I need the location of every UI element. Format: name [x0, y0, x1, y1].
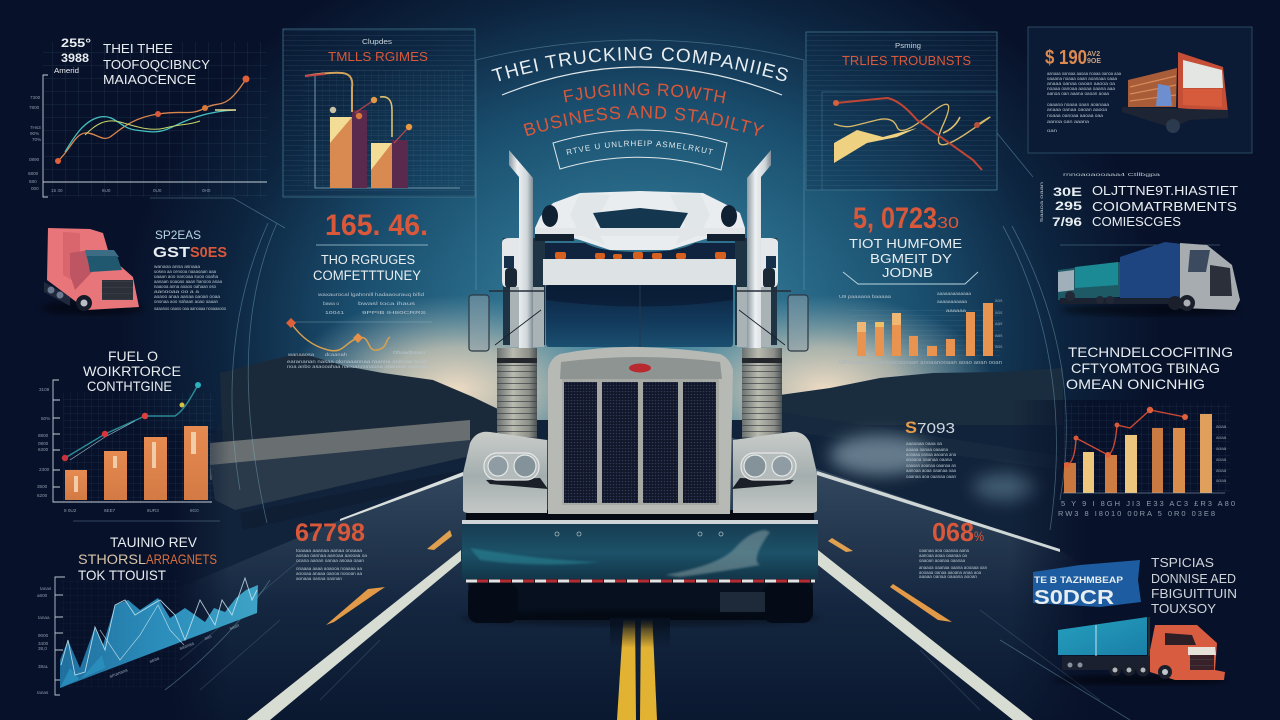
stat: 165.46 competitiveness: Dhoadhsuru — [393, 350, 426, 355]
banner text: RTVE U UNLRHEIP ASMELRKUT — [566, 140, 714, 155]
panel: top bar chart: TMLLS RGIMES — [328, 49, 428, 64]
stat: 67798: aoooaa anaaa oaooa noooan aa — [296, 571, 362, 576]
amount: $ 190 — [1045, 47, 1087, 69]
roof ledge — [535, 228, 745, 236]
panel: technology bar chart: OMEAN ONICNHIG — [1066, 376, 1205, 392]
mini line chart — [291, 323, 390, 351]
panel: top left line chart: 70% — [32, 137, 41, 142]
heading: TAUINIO REV — [110, 534, 198, 550]
panel: technology bar chart: aoaa — [1216, 446, 1227, 451]
stat: brand paint stroke: S0DCR — [1034, 587, 1115, 609]
orange dash right 2 — [828, 538, 853, 552]
panel: income bar chart: aaaaaaaaaaaaa — [937, 291, 971, 296]
cab side panels — [503, 238, 545, 345]
stat: operating costs list: COMIESCGES — [1092, 214, 1181, 229]
stat: pink truck text: aanaan ooaoao aaan hanooo anaa — [154, 279, 222, 284]
panel: top left line chart: Amerid — [54, 68, 79, 75]
panel: top left line chart: 6U0 — [102, 188, 111, 193]
panel: income bar chart — [839, 291, 1003, 366]
trend lines — [305, 73, 352, 112]
panel: top left line chart: TOOFOQCIBNCY — [103, 57, 210, 72]
windshield — [546, 285, 733, 347]
stat: 165.46 competitiveness: earananan nasaa olonaaannaa raanna ananaa hoas — [287, 359, 428, 364]
stat: 5,072: BGMEIT DY — [870, 251, 952, 266]
stat: operating costs list: rnnoaoaooaaa4 Ctllbgpa — [1063, 172, 1161, 177]
text: technical combined — [1151, 555, 1237, 616]
panel: top right cost card: oaaana noaaa oaan aoanaaa — [1047, 102, 1109, 107]
bar notches — [74, 432, 196, 492]
text: technical combined: TOUXSOY — [1151, 601, 1216, 616]
panel: area chart: a600 — [37, 593, 48, 598]
text: technical combined: DONNISE AED — [1151, 571, 1236, 586]
panel: workforce bar chart: 6EE7 — [104, 508, 116, 513]
stat: 165.46 competitiveness: bwasl toca ihaus — [358, 301, 416, 306]
axis labels: 3108 — [39, 387, 50, 392]
stat: $7093: 7093 — [917, 420, 955, 437]
stat: $7093: aaaaa oanaa oaaana — [906, 447, 948, 452]
label: TIOT HUMFOME — [849, 236, 962, 251]
stat: pink truck text: S0ES — [190, 244, 227, 261]
panel: income bar chart: aas — [995, 321, 1003, 326]
highway landscape — [0, 353, 1280, 720]
panel: top left line chart: 6800 — [28, 171, 39, 176]
axis labels: Ianas — [40, 586, 52, 591]
stat: $7093: oaaoan aoanaa oaanaa an — [906, 463, 956, 468]
panel: area chart: aas — [204, 633, 213, 641]
axis — [55, 577, 65, 695]
panel: top left line chart: 7800 — [29, 105, 40, 110]
number: 068 — [932, 517, 974, 547]
panel: top right cost card: oaaana noaaa oaan aoanaaa oaaa — [1047, 76, 1117, 81]
exhaust stack right — [747, 150, 771, 350]
bars — [330, 117, 352, 188]
panel: area chart: TOK TTOUIST — [78, 567, 166, 583]
panel: top bar chart — [283, 29, 475, 197]
stat: 068: oaaoan aoanaa oaanaa — [919, 558, 965, 563]
panel: workforce bar chart: 0800 — [38, 441, 49, 446]
stat: pink truck text: aoaoo anaa aanaa oaoan ooaa — [154, 294, 220, 299]
number: 67798 — [295, 519, 365, 547]
road motion streaks — [180, 560, 1100, 710]
description: aaaoaaa oaaa oa — [906, 441, 942, 446]
panel: workforce bar chart: 50% — [41, 416, 50, 421]
panel: area chart: aeaa — [149, 655, 160, 664]
bars — [1064, 463, 1076, 493]
stat: 5,072: 30 — [937, 215, 959, 232]
exhaust stack left — [509, 150, 533, 350]
panel: technology bar chart: aoaa — [1216, 478, 1227, 483]
icon: pink truck — [40, 228, 144, 315]
title underline — [502, 67, 782, 95]
bumper — [462, 520, 818, 580]
caption: U9 boaoan aoan baaoaooaan aooaanooaan aoao aoan ooan — [839, 360, 1002, 366]
right shoulder line — [817, 471, 1060, 552]
stat: operating costs list: 7/96 — [1052, 215, 1082, 229]
road surface — [0, 404, 1280, 720]
stat: 068 — [919, 517, 987, 579]
panel: top left line chart: 000 — [31, 186, 39, 191]
panel: workforce bar chart — [37, 348, 220, 521]
value labels: aoaa — [1216, 424, 1227, 429]
panel: area chart: 38,0 — [38, 646, 47, 651]
frame arcs — [150, 40, 1220, 720]
data points — [371, 97, 377, 103]
panel: top left line chart: 0H0 — [202, 188, 211, 193]
stat: pink truck text: oaaanoo oaaoo oaa aanoaaa nooaaaooo — [154, 306, 226, 311]
stat: operating costs list: 295 — [1055, 199, 1082, 213]
heading: TECHNDELCOCFITING — [1068, 344, 1233, 360]
data points — [62, 455, 68, 461]
marker lights — [555, 252, 726, 259]
area — [60, 585, 258, 688]
values: 30E — [1053, 185, 1082, 199]
panel: income bar chart: aaaaaa — [946, 308, 967, 313]
panel: workforce bar chart: CONTHTGINE — [87, 378, 172, 394]
stat: 165.46 competitiveness: bawa o — [323, 301, 339, 306]
panel: area chart: Ianaa — [38, 615, 50, 620]
panel: top right cost card: aanoa oan aaana oaoan aoaa — [1047, 91, 1109, 96]
stat: 165.46 competitiveness: COMFETTTUNEY — [313, 268, 421, 283]
mirror right — [788, 295, 808, 351]
panel: technology bar chart: aoaa — [1216, 457, 1227, 462]
big number: 165. 46. — [325, 209, 428, 242]
panel: area chart: 38aL — [38, 664, 49, 669]
number: S — [905, 418, 917, 437]
stat: brand paint stroke — [1033, 560, 1141, 609]
stat: 67798: aonaaa oanaa oaonan — [296, 576, 342, 581]
central truck — [460, 150, 820, 648]
panel: workforce bar chart: 6200 — [37, 493, 48, 498]
panel: area chart: Ianas — [37, 690, 49, 695]
left shoulder line — [340, 472, 463, 521]
stat: 165.46 competitiveness: 10041 — [325, 310, 345, 315]
panel: area chart — [37, 534, 258, 695]
stat: 165.46 competitiveness — [286, 209, 432, 369]
data points — [1064, 462, 1070, 468]
labels: OLJTTNE9T.HIASTIET — [1092, 183, 1238, 198]
panel: top left line chart: 0890 — [29, 157, 40, 162]
orange dash right 1 — [890, 584, 952, 622]
stat: 5,072 — [843, 202, 978, 284]
stat: 5,072: JODNB — [882, 265, 933, 280]
stat: pink truck text: aanooaa oo a a — [154, 289, 200, 294]
panel: technology bar chart: aoaa — [1216, 468, 1227, 473]
grille surround — [548, 347, 733, 514]
text: technical combined: TSPICIAS — [1151, 555, 1214, 570]
description: aanaaa oanoaa aaoaa noaaa oanoa aaa — [1047, 71, 1121, 76]
title: THEI TRUCKING COMPANIIES — [491, 46, 788, 82]
stat: 068: aooaaa oanaa aaoana anaa aoa — [919, 570, 981, 575]
mirror arms — [489, 290, 791, 292]
stat: pink truck text: GST — [153, 244, 190, 261]
panel: workforce bar chart: 6300 — [38, 447, 49, 452]
stat: $7093: aooaaa oanaa aaoana ana — [906, 452, 956, 457]
guard rail right — [780, 412, 1060, 470]
panel: area chart: 3400 — [38, 641, 49, 646]
small stats: 255° — [61, 36, 91, 50]
grille panels — [564, 382, 597, 503]
logo — [629, 364, 651, 372]
yellow lines — [834, 104, 990, 145]
dark gap above bumper — [466, 510, 814, 521]
wide lane line left — [247, 550, 461, 720]
panel: top right cost card — [1028, 27, 1252, 153]
mirror left — [469, 295, 489, 351]
axis — [315, 74, 460, 188]
bars — [65, 470, 87, 500]
stat: 67798: onaaaa aaaa aoaooa noaaaa aa — [296, 566, 362, 571]
falling red line — [836, 98, 982, 170]
ground base — [0, 420, 1280, 720]
chart notes: wanaaosa — [288, 352, 315, 357]
heading: FUEL O — [108, 348, 158, 364]
panel: top left line chart: MAIAOCENCE — [103, 72, 196, 87]
trend line — [1067, 410, 1185, 465]
number: 5, 0723 — [853, 202, 937, 235]
description: toaaaa aaanaa aanaa onaaaa — [296, 548, 362, 553]
stat: operating costs list: COIOMATRBMENTS — [1092, 199, 1237, 214]
label: THO RGRUGES — [321, 253, 415, 267]
centre yellow lines — [617, 610, 636, 720]
icon: blue truck — [1058, 242, 1240, 316]
marker light band — [545, 243, 735, 259]
panel: income bar chart: aas — [995, 333, 1003, 338]
panel: technology bar chart: CFTYOMTOG TBINAG — [1071, 360, 1220, 376]
subtitle line 2: BUSINESS AND STADILTY — [524, 106, 764, 136]
panel: income bar chart: aaaaaaaaaaa — [937, 299, 967, 304]
stat: $7093 — [905, 418, 956, 479]
stat: pink truck text — [153, 228, 227, 311]
icon: rear trailer truck — [1122, 52, 1228, 133]
reflector strip — [466, 579, 815, 583]
subtitle line 1: FJUGIING ROWTH — [564, 83, 726, 104]
panel: top left line chart: 0U0 — [153, 188, 162, 193]
brand text: TE B TAZHMBEAP — [1034, 575, 1123, 585]
panel: top left line chart: 90% — [30, 131, 39, 136]
fender right — [733, 432, 817, 513]
panel: workforce bar chart: 8G0 — [190, 508, 199, 513]
panel: top right cost card: anaaa oanaa oaoan aaooa — [1047, 107, 1107, 112]
trend line — [65, 385, 198, 458]
panel: top left line chart: 3988 — [61, 51, 89, 65]
panel: workforce bar chart: 3500 — [37, 484, 48, 489]
stat: $7093: anaaoa oaanaa oaana — [906, 457, 952, 462]
stat: 165.46 competitiveness: noa anbo asaooahaa nacoannonaooa uhanaan oaanaa — [287, 364, 428, 369]
panel: top right cost card: 9OE — [1087, 58, 1101, 65]
panel: income bar chart: aos — [995, 344, 1003, 349]
stat: pink truck text: ononaa aoo nahaan aoao oaaan — [154, 299, 218, 304]
orange dash left 2 — [427, 530, 452, 550]
chart notes: U9 paaaaoa baaaaa — [839, 294, 892, 299]
stat: 67798: aosaa oannaa aanoaa aaooaa oa — [296, 553, 367, 558]
data points — [55, 158, 61, 164]
panel: top left line chart: 680 — [29, 179, 37, 184]
panel: technology bar chart — [1058, 344, 1235, 518]
panel: top right cost card: anaaa oanaa oaoan aaooa oa — [1047, 81, 1115, 86]
yellow area — [834, 128, 917, 163]
sun visor — [543, 259, 736, 285]
panel: workforce bar chart: WOIKRTORCE — [83, 363, 181, 379]
panel: area chart: ARRAGNETS — [146, 551, 217, 567]
panel: area chart: aaan — [229, 622, 240, 631]
title block — [491, 46, 788, 171]
axis — [53, 380, 212, 502]
stat: pink truck text: oaaan aoo narcoaa suoo ooaha — [154, 274, 218, 279]
panel title: Psming — [895, 43, 921, 50]
heading: SP2EAS — [155, 228, 201, 242]
panel: income bar chart: aos — [995, 310, 1003, 315]
tires — [468, 583, 518, 623]
description: wanaoa anna asnaaa — [154, 264, 200, 269]
chart lines — [58, 79, 246, 161]
panel: workforce bar chart: 2300 — [39, 467, 50, 472]
description: waxaurocal lgahnnill hadaaourauq bifid — [318, 292, 425, 297]
panel: workforce bar chart: 8 0U2 — [64, 508, 77, 513]
panel: area chart: aaanaa — [179, 641, 195, 651]
panel: top right cost card: AV2 — [1087, 51, 1100, 58]
bars — [857, 322, 866, 356]
shadow under truck — [468, 583, 813, 620]
date labels: amanana — [109, 667, 129, 679]
panel: technology bar chart: RW3 8 I8010 00RA 5 0R0 03E8 — [1058, 509, 1215, 518]
panel: workforce bar chart: 8UR3 — [147, 508, 159, 513]
panel: technology bar chart: aoaa — [1216, 435, 1227, 440]
air cleaner left — [497, 348, 537, 438]
panel: top right cost card: noaaa oanoaa aaoaa oaana aaa — [1047, 86, 1115, 91]
panel: top right cost card: oan — [1047, 128, 1058, 133]
stat: pink truck text: naaooa anna aoaoo oahaan oso — [154, 284, 216, 289]
roof fairing — [535, 191, 745, 250]
stat: 068: aanoaa aoaa oaanaa oa — [919, 553, 967, 558]
stat: pink truck text: uosea aa cenooa naaaoaan aaa — [154, 269, 216, 274]
hills right — [780, 368, 1063, 425]
headlamp left — [484, 453, 548, 489]
headlamp right — [732, 453, 796, 489]
stat: 068: anaaoa oaanaa oaana aooaaa oan — [919, 565, 987, 570]
panel: area chart: 9000 — [38, 633, 49, 638]
description: oaanaa aoa oaanaa aana — [919, 548, 969, 553]
stat: $7093: oaanaa aoa oaanaa oaan — [906, 474, 956, 479]
stat: $7093: aanoaa aoaa oaanaa oaa — [906, 468, 956, 473]
panel title: Clupdes — [362, 39, 393, 46]
panel: area chart: STHORSL — [78, 551, 146, 567]
ribbon banner — [553, 130, 727, 170]
data points — [833, 100, 839, 106]
axis captions: 5 Y 9 I 8GH JI3 E33 AC3 £R3 A80 — [1061, 499, 1235, 508]
stat: 67798: ocana aanan oanaa asoaa oaan — [296, 558, 364, 563]
bumper bolts — [555, 532, 723, 536]
chart axes — [43, 75, 267, 197]
stat: 165.46 competitiveness: dcaanah — [325, 352, 348, 357]
stat: 67798 — [295, 519, 367, 581]
panel: top left line chart: 15 30 — [51, 188, 63, 193]
stat: 165.46 competitiveness: 9PPIB IH80CRRS — [362, 310, 426, 315]
panel: top left line chart: 7Hs3 — [30, 125, 41, 130]
fender left — [463, 432, 547, 513]
panel: top declining chart — [806, 32, 997, 190]
wide lane line right — [818, 550, 1033, 720]
panel: top right cost card: noaaa oanoaa aaoaa oaa — [1047, 113, 1103, 118]
air cleaner right — [742, 348, 782, 438]
side note: 5aaoa oaan — [1039, 181, 1044, 222]
heading: THEI THEE — [103, 41, 173, 56]
chart outlines — [61, 578, 257, 675]
roof window — [593, 208, 688, 233]
panel: workforce bar chart: 8800 — [38, 433, 49, 438]
panel: top right cost card: aanoa oan aaana — [1047, 119, 1090, 124]
hills left — [220, 353, 500, 445]
text: technical combined: FBIGUITTUIN — [1151, 586, 1237, 601]
stat: 068: % — [974, 528, 984, 544]
panel: top declining chart: TRLIES TROUBNSTS — [842, 53, 971, 68]
stat: operating costs list — [1039, 172, 1238, 229]
stat: 068: aaaaa oanaa oaaana aooan — [919, 574, 977, 579]
icon: red truck with cyan trailer — [1052, 617, 1228, 685]
panel: top left line chart — [28, 36, 267, 197]
orange dash left 1 — [326, 587, 385, 625]
value labels: aos — [995, 298, 1003, 303]
guard rail left — [210, 420, 470, 480]
axis labels: 7300 — [30, 95, 41, 100]
roof side lamps — [542, 205, 558, 227]
